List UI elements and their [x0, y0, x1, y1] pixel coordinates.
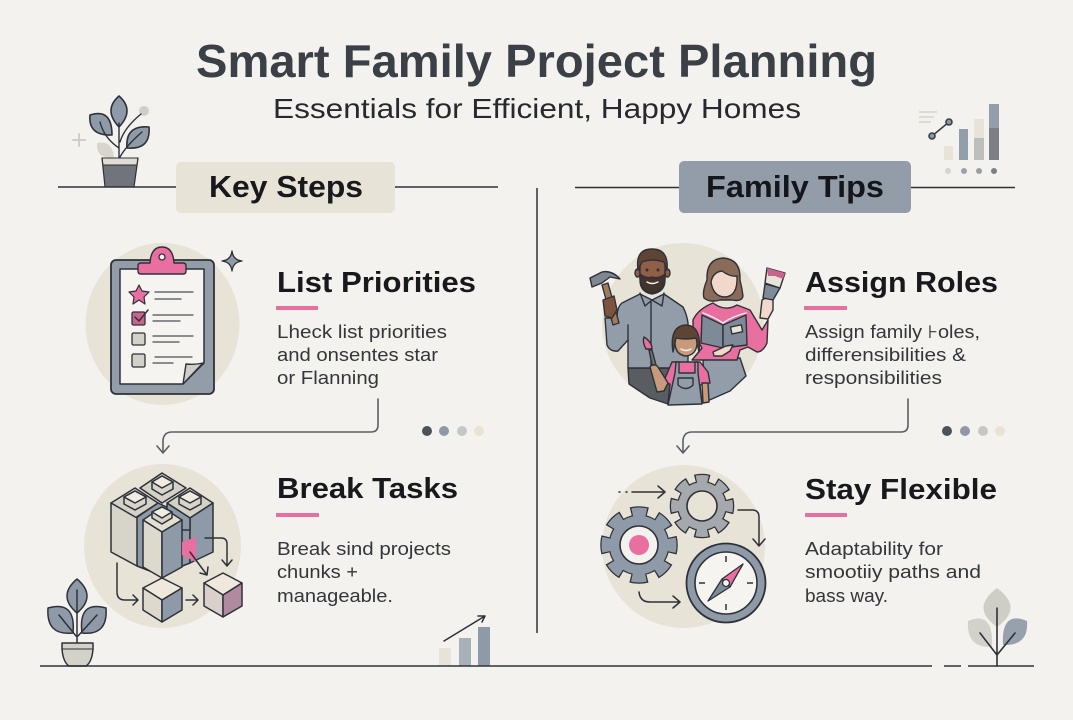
- icon: potted plant bottom left: [48, 579, 106, 666]
- compass: [686, 544, 766, 622]
- mother: [692, 258, 785, 402]
- step: Assign Roles: Assign Roles: [805, 267, 998, 299]
- child: [643, 325, 710, 405]
- panel header: Key Steps: Key Steps: [209, 169, 363, 204]
- progress dots left: [422, 426, 484, 436]
- arrow: assign roles to stay flexible: [677, 399, 908, 453]
- step: Break Tasks: Break Tasks: [277, 473, 458, 505]
- step: List Priorities: [276, 267, 476, 388]
- father: [605, 249, 688, 404]
- step: Stay Flexible: [805, 474, 997, 606]
- icon: potted plant top left: [73, 96, 149, 187]
- icon: sprout bottom right: [968, 588, 1027, 666]
- panel header: Key Steps: [58, 162, 498, 213]
- icon: family with tools: [590, 243, 785, 405]
- step: Assign Roles: responsibilities: [805, 368, 942, 388]
- subtitle: Essentials for Efficient, Happy Homes: [273, 93, 801, 124]
- step: List Priorities: List Priorities: [277, 267, 476, 299]
- step: Assign Roles: [804, 267, 998, 388]
- large gear: [606, 512, 672, 578]
- step: Break Tasks: [276, 473, 458, 606]
- step: List Priorities: and onsentes star: [277, 345, 438, 365]
- process arrows: [632, 486, 765, 608]
- icon: growth chart bottom: [439, 616, 490, 666]
- hammer: [590, 272, 620, 325]
- step: List Priorities: or Flanning: [277, 368, 379, 388]
- arrow: list priorities to break tasks: [157, 399, 378, 453]
- progress dots right: [942, 426, 1005, 436]
- step: Stay Flexible: Adaptability for: [805, 539, 943, 559]
- step: Break Tasks: Break sind projects: [277, 539, 451, 559]
- step: Stay Flexible: Stay Flexible: [805, 474, 997, 506]
- bottom baseline: [40, 665, 1034, 667]
- panel header: Family Tips: Family Tips: [706, 169, 884, 204]
- step: Break Tasks: manageable.: [277, 586, 393, 606]
- step: Break Tasks: chunks +: [277, 562, 358, 582]
- icon: clipboard: [86, 243, 242, 405]
- step: Stay Flexible: bass way.: [805, 586, 888, 606]
- title: Smart Family Project Planning: [196, 35, 877, 87]
- step: List Priorities: Lheck list priorities: [277, 322, 447, 342]
- small gear: [675, 479, 729, 533]
- center divider: [536, 188, 538, 633]
- panel header: Family Tips: [575, 161, 1015, 213]
- step: Assign Roles: differensibilities &: [805, 345, 966, 365]
- icon: stacked blocks: [84, 464, 242, 628]
- icon: mini chart top right: [919, 104, 999, 174]
- icon: gears and compass: [602, 465, 766, 628]
- step: Stay Flexible: smootiiy paths and: [805, 562, 981, 582]
- step: Assign Roles: Assign family ⊦oles,: [805, 322, 980, 342]
